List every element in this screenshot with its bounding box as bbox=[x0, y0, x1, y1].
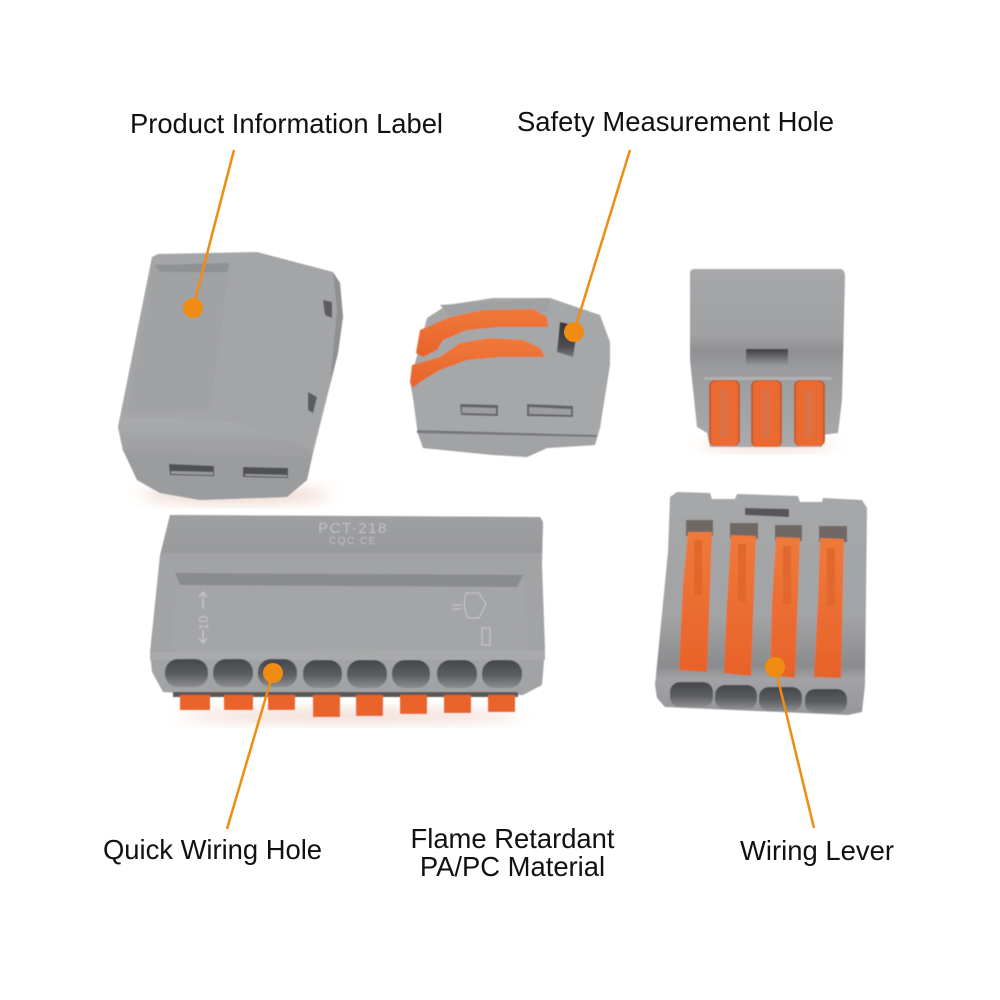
lever 2 bbox=[751, 380, 782, 447]
callout line: product information label bbox=[183, 150, 234, 318]
label: flame retardant material: PA/PC Material bbox=[420, 851, 605, 882]
wiring holes bbox=[165, 659, 522, 688]
label: flame retardant material: Flame Retardant bbox=[410, 823, 615, 854]
lever 2 bbox=[724, 535, 756, 676]
icon: length marking: 10 bbox=[196, 616, 211, 630]
model text: PCT-218 bbox=[318, 520, 388, 537]
label: safety measurement hole: Safety Measurement Hole bbox=[517, 106, 834, 137]
lever tabs bbox=[180, 695, 515, 717]
model text: CQC CE bbox=[329, 536, 377, 547]
connector: bottom left, eight holes bbox=[150, 515, 545, 722]
callout line: safety measurement hole bbox=[564, 150, 630, 342]
callout line: quick wiring hole bbox=[227, 663, 283, 829]
lower lever bbox=[410, 338, 545, 388]
lever 4 bbox=[814, 538, 844, 678]
upper lever bbox=[416, 309, 548, 357]
lever 1 bbox=[709, 380, 740, 446]
connector: bottom right, four levers bbox=[655, 492, 867, 715]
lever 1 bbox=[679, 532, 712, 672]
rim and lever shadow bbox=[173, 692, 518, 697]
label: product information label: Product Information Label bbox=[130, 108, 443, 139]
lever 3 bbox=[794, 380, 825, 446]
label: quick wiring hole: Quick Wiring Hole bbox=[103, 834, 322, 865]
connector: top right, three levers bbox=[690, 269, 845, 450]
label: wiring lever: Wiring Lever bbox=[740, 835, 894, 866]
connector: top left, product label bbox=[118, 252, 343, 503]
connector: top middle, two levers bbox=[410, 298, 610, 457]
lever 3 bbox=[770, 537, 800, 678]
icon: length marking bbox=[196, 592, 211, 643]
model text bbox=[318, 520, 388, 547]
icon: strip marking bbox=[452, 593, 490, 645]
callout line: wiring lever bbox=[765, 657, 814, 828]
